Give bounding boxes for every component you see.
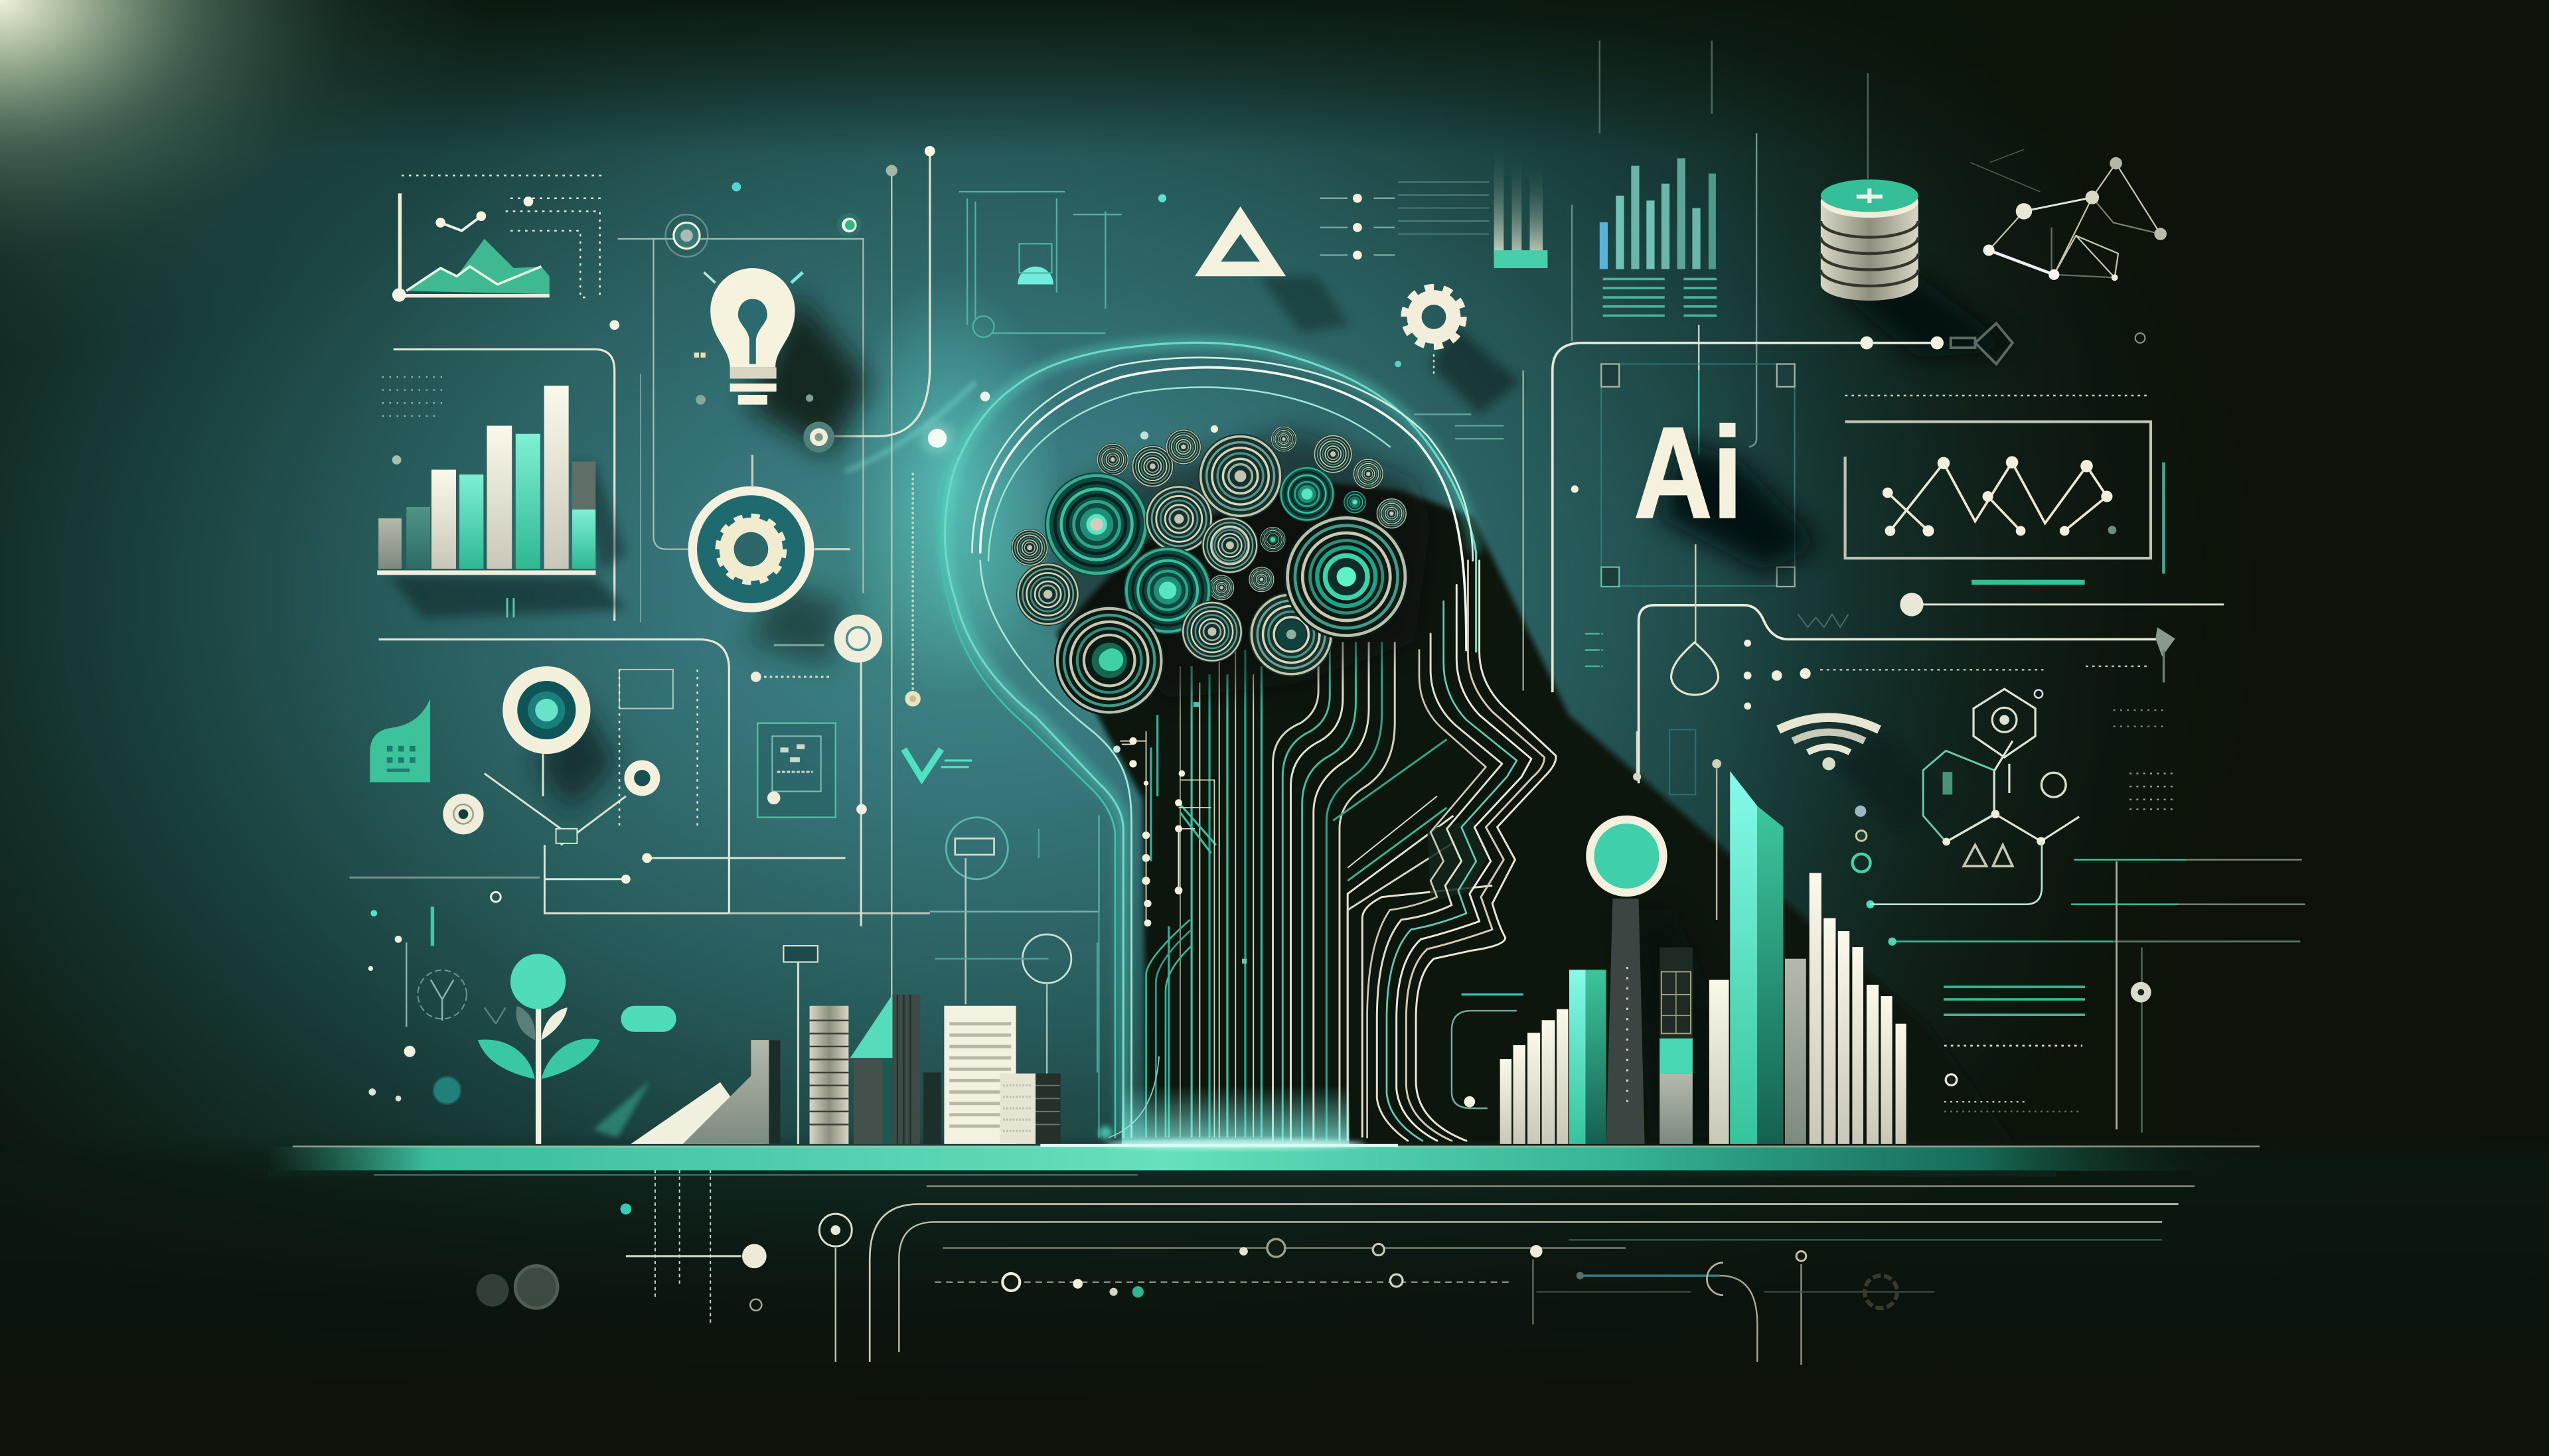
icon: wifi (1778, 717, 1951, 829)
bottom panel backdrop (0, 1134, 2549, 1456)
lower left head tendrils (1109, 920, 1192, 1137)
panel: right bottom bars (1500, 729, 1906, 1144)
circuit traces: bending lines (1273, 642, 1492, 1141)
icon: circle tag (930, 816, 1099, 1076)
panel: top left line chart (392, 175, 603, 302)
panel: bar chart left (377, 377, 626, 617)
AI shadow (1658, 439, 1821, 572)
ground band (268, 1086, 2260, 1177)
circuit nodes left of stem (1113, 702, 1247, 964)
icon: top gear (1395, 287, 1520, 439)
icon: gear ring (692, 490, 845, 666)
circuit traces: vertical brain stem (1151, 650, 1261, 1137)
panel: bottom circuit lines (374, 1170, 2195, 1365)
face detail patch (1427, 821, 1489, 902)
circuit lines upper right (1523, 40, 1868, 691)
panel: top circuit emblem (959, 192, 1122, 337)
panel: gradient block (1494, 143, 1547, 268)
panel: node network lower left (350, 670, 930, 913)
icon: triangle (1158, 182, 1489, 333)
icon: hexagon network (1923, 689, 2175, 866)
head outlines (939, 342, 1476, 1137)
panel: left bottom skyline (593, 946, 1112, 1144)
chart: network graph (1970, 149, 2167, 281)
icon: cream ring and dots (751, 615, 921, 707)
AI label: Ai (1634, 400, 1742, 546)
brain spiral cluster (1011, 425, 1430, 715)
circuit frames left (379, 151, 930, 1040)
bar chart: top thin bars (1600, 158, 1717, 316)
panel: left bottom plant (368, 907, 676, 1144)
panel: small circuit square and check (757, 723, 972, 818)
icon: target node (502, 666, 618, 812)
light streak near head (845, 382, 975, 471)
icon: mint calendar (370, 699, 430, 782)
panel: right status lines (1853, 806, 2305, 1133)
icon: ring nodes (609, 146, 990, 455)
icon: bottom nodes (477, 1203, 1897, 1311)
panel: AI frame (1553, 323, 2013, 692)
head outline glow (945, 342, 1476, 1137)
small bracket near face (1452, 995, 1523, 1108)
head dark shadow area (1057, 479, 2016, 1145)
circuit traces: face profile contour (1367, 561, 1556, 1141)
icon: database cylinder (1821, 179, 2016, 358)
line chart: zigzag box (1845, 333, 2165, 585)
icon: lightbulb (694, 268, 870, 455)
connector lines and drop icon (1585, 544, 2224, 783)
